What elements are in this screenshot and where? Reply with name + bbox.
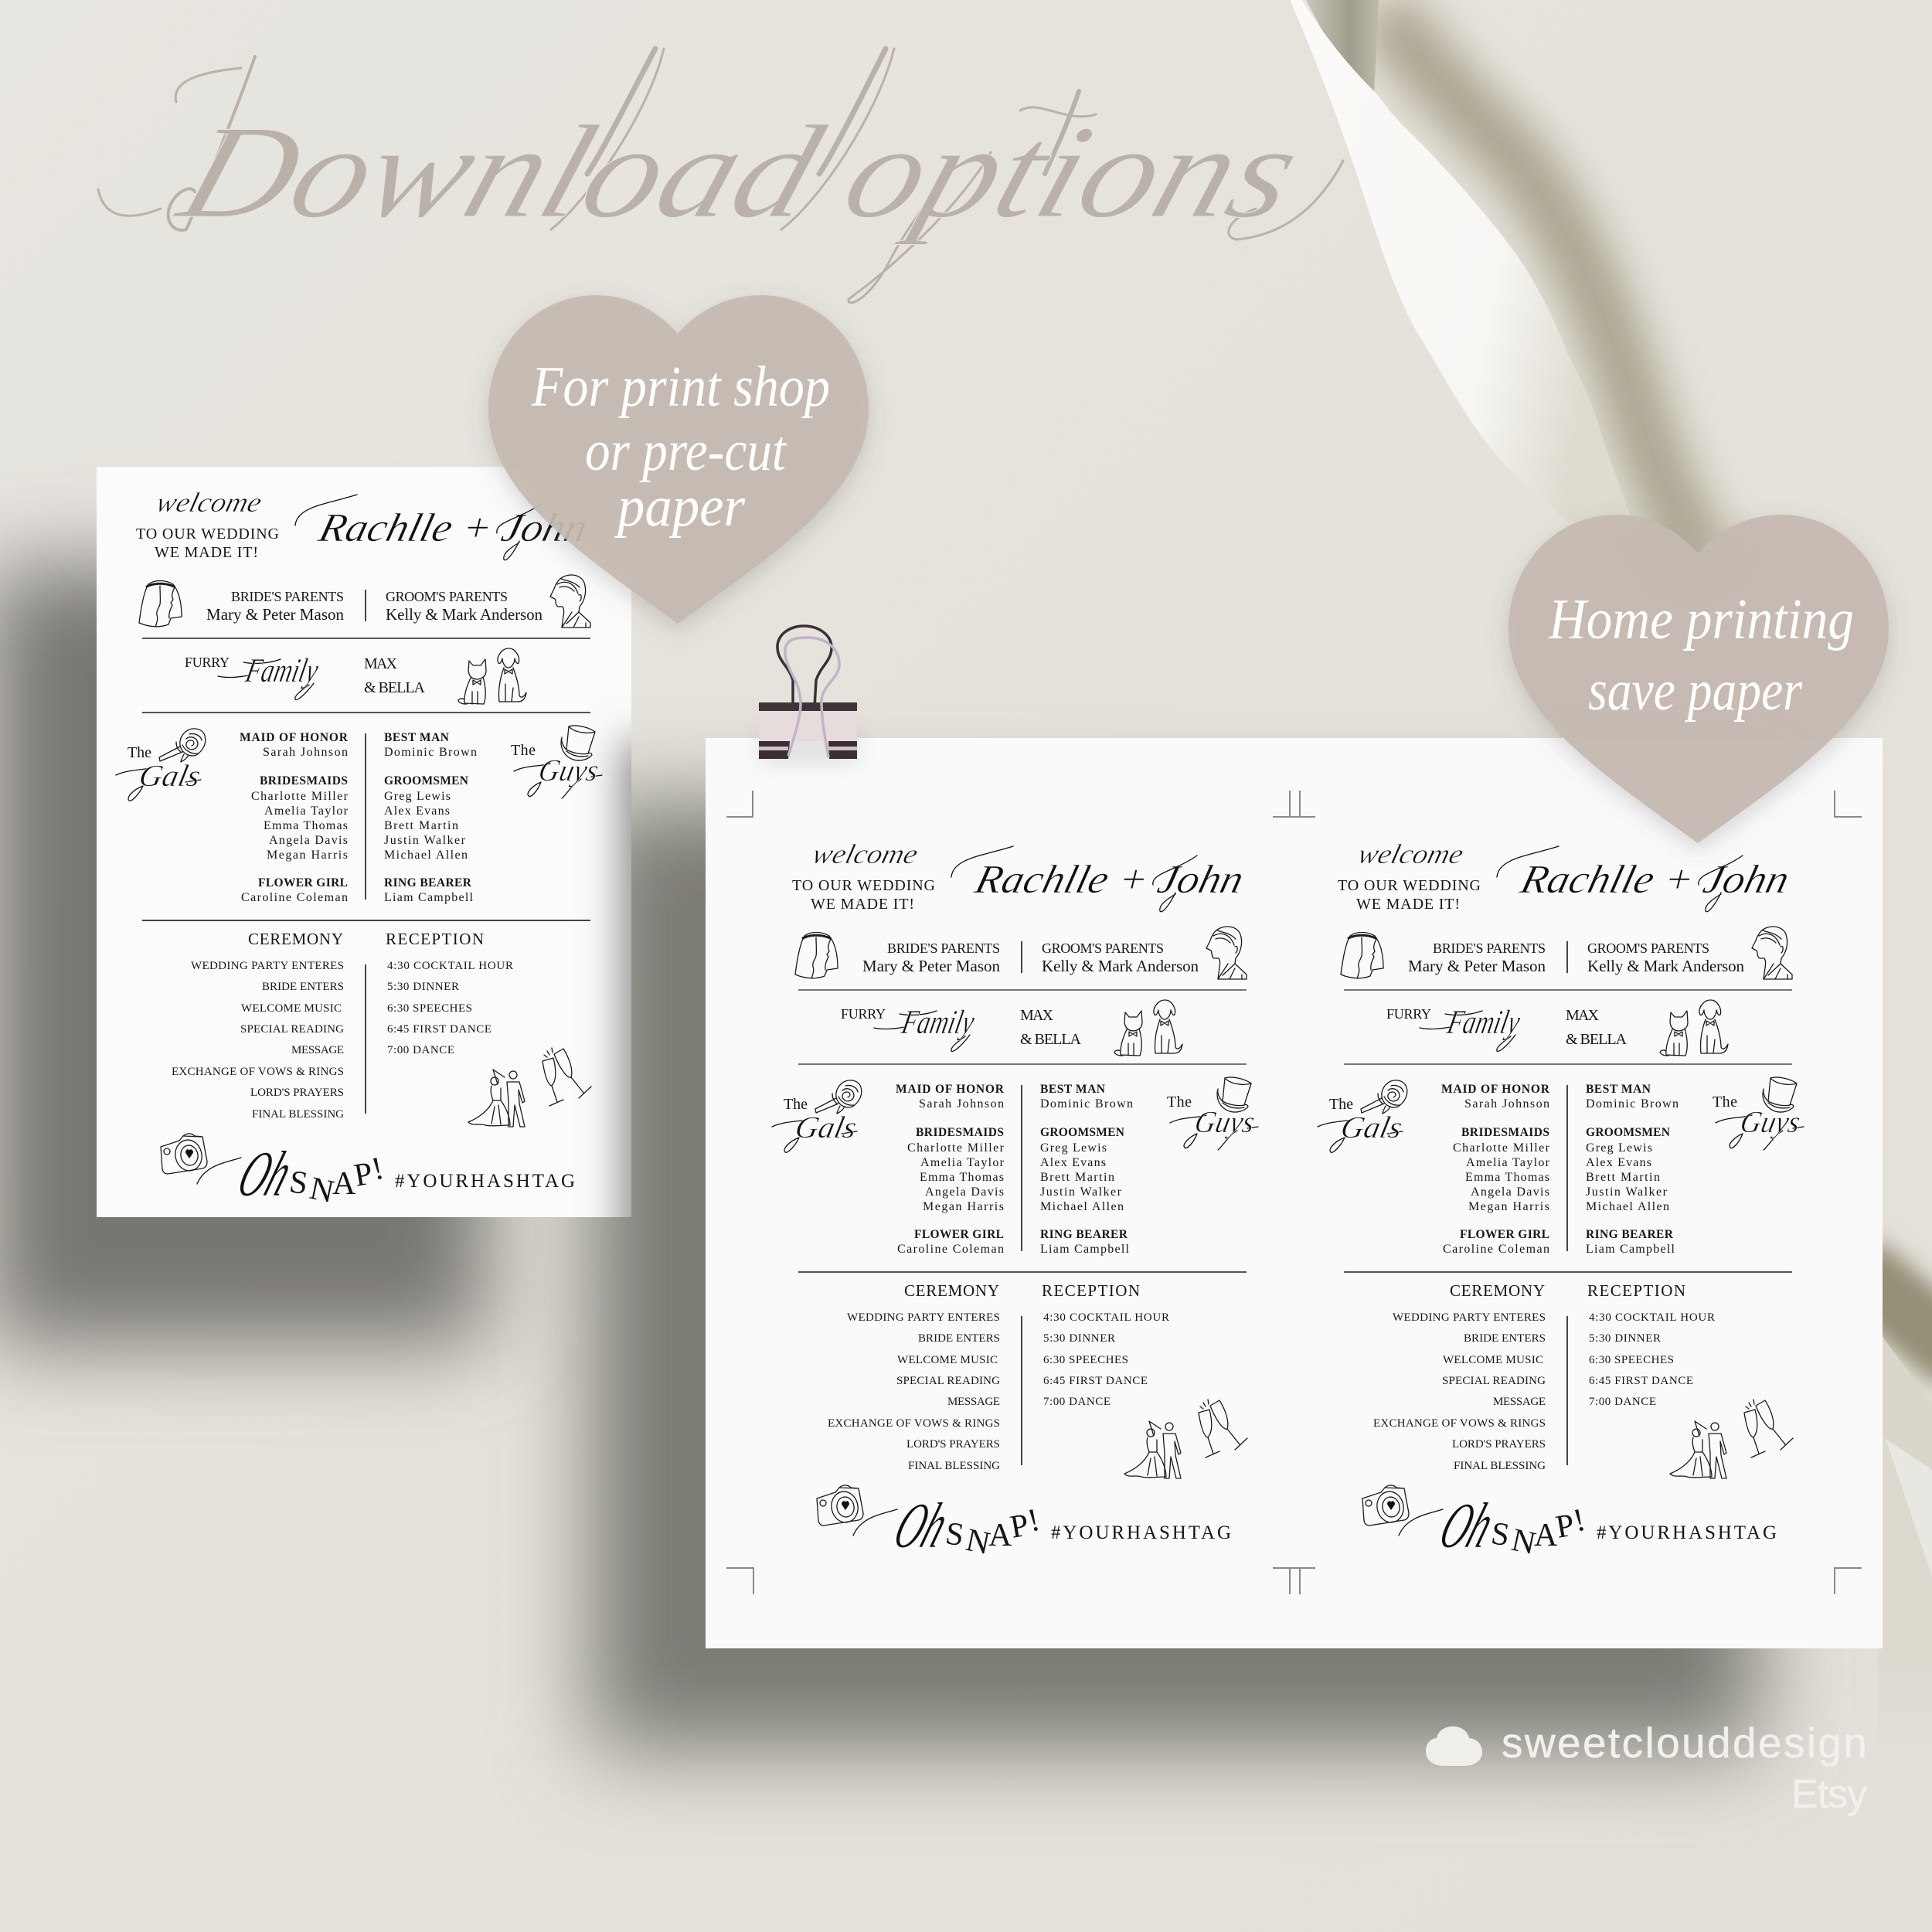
- ceremony: FINAL BLESSING: [1454, 1460, 1546, 1472]
- ceremony: WEDDING PARTY ENTERES: [847, 1311, 1000, 1324]
- reception: RECEPTION: [1042, 1281, 1140, 1300]
- icon: camera: [1362, 1485, 1409, 1526]
- bride side party: MAID OF HONOR: [896, 1083, 1005, 1096]
- icon: champagne glasses: [1744, 1400, 1793, 1458]
- groom side party: Brett Martin: [1586, 1171, 1660, 1184]
- heart text: [531, 355, 830, 539]
- groom side party: BEST MAN: [1040, 1083, 1105, 1096]
- oh snap hashtag: [1430, 1489, 1777, 1562]
- welcome script: welcome: [1355, 838, 1467, 869]
- brand name: sweetclouddesign: [1502, 1719, 1867, 1767]
- program content: sheet copy two: [1318, 838, 1804, 1562]
- welcome lines: WE MADE IT!: [811, 896, 914, 913]
- welcome lines: TO OUR WEDDING: [136, 526, 279, 543]
- program content: sheet copy one: [772, 838, 1258, 1562]
- welcome lines: [1338, 877, 1481, 913]
- icon: dancing couple: [1670, 1421, 1726, 1478]
- the gals: [1329, 1096, 1406, 1145]
- ceremony: FINAL BLESSING: [908, 1460, 1000, 1472]
- parents: Mary & Peter Mason: [206, 605, 345, 624]
- ceremony: MESSAGE: [947, 1396, 1000, 1408]
- bride side party: Charlotte Miller: [251, 790, 349, 803]
- heart text: Home printing: [1548, 588, 1854, 651]
- heart text: For print shop: [531, 355, 830, 419]
- oh snap hashtag: Oh: [1430, 1489, 1503, 1561]
- logo: [1426, 1719, 1867, 1817]
- parents: Kelly & Mark Anderson: [1587, 957, 1745, 975]
- bride side party: Megan Harris: [923, 1200, 1004, 1213]
- ceremony: LORD'S PRAYERS: [906, 1438, 1000, 1451]
- the guys: The: [1713, 1094, 1737, 1111]
- reception: 5:30 DINNER: [1043, 1332, 1115, 1345]
- icon: top hat: [1217, 1077, 1251, 1112]
- couple names: Rachlle + John: [970, 858, 1248, 902]
- bride side party: FLOWER GIRL: [1460, 1228, 1549, 1241]
- icon: cat and dog: [458, 648, 526, 704]
- groom side party: Greg Lewis: [1040, 1141, 1107, 1155]
- bride side party: Emma Thomas: [264, 819, 348, 832]
- ceremony: SPECIAL READING: [240, 1023, 344, 1036]
- bride side party: Amelia Taylor: [1466, 1156, 1550, 1169]
- reception: 7:00 DANCE: [1589, 1396, 1656, 1408]
- groom side party: Brett Martin: [1040, 1171, 1114, 1184]
- the gals: The: [128, 744, 151, 761]
- reception: [386, 930, 513, 1056]
- welcome lines: [136, 526, 279, 561]
- groom side party: Michael Allen: [1586, 1200, 1669, 1213]
- welcome lines: TO OUR WEDDING: [792, 877, 935, 894]
- groom side party: Justin Walker: [384, 834, 466, 847]
- parents: Kelly & Mark Anderson: [386, 605, 543, 624]
- oh snap hashtag: Oh: [885, 1489, 957, 1561]
- reception: [1587, 1281, 1715, 1408]
- parents: BRIDE'S PARENTS: [887, 940, 1000, 956]
- the guys: Guys: [1192, 1104, 1258, 1139]
- reception: 7:00 DANCE: [387, 1044, 454, 1056]
- groom side party: Brett Martin: [384, 819, 458, 832]
- ceremony: [172, 930, 344, 1121]
- the gals: Gals: [136, 758, 204, 793]
- reception: RECEPTION: [1587, 1281, 1685, 1300]
- furry family: MAX: [1020, 1007, 1054, 1024]
- groom side party: GROOMSMEN: [1586, 1126, 1670, 1139]
- furry family: & BELLA: [1020, 1031, 1082, 1048]
- groom side party: Liam Campbell: [1586, 1243, 1675, 1256]
- icon: groom: [1206, 927, 1247, 979]
- the guys: [1167, 1094, 1258, 1139]
- couple names: Rachlle + John: [1515, 858, 1794, 902]
- ceremony: SPECIAL READING: [1442, 1375, 1546, 1387]
- ceremony: MESSAGE: [1493, 1396, 1546, 1408]
- parents: [862, 940, 1199, 975]
- ceremony: WELCOME MUSIC: [1443, 1354, 1543, 1366]
- groom side party: Michael Allen: [384, 849, 468, 862]
- reception: 6:45 FIRST DANCE: [1043, 1375, 1148, 1387]
- bride side party: Angela Davis: [925, 1185, 1004, 1199]
- parents: GROOM'S PARENTS: [386, 589, 508, 604]
- the gals: [128, 744, 204, 793]
- bride side party: Sarah Johnson: [1464, 1097, 1549, 1111]
- reception: 4:30 COCKTAIL HOUR: [1043, 1311, 1169, 1324]
- furry family: FURRY: [841, 1006, 886, 1022]
- couple names: Rachlle + John: [314, 506, 592, 550]
- oh snap hashtag: Oh: [229, 1138, 301, 1209]
- ribbon lower right shadow: [1855, 1267, 1932, 1360]
- bride side party: Charlotte Miller: [907, 1141, 1005, 1155]
- bride side party: [896, 1083, 1005, 1256]
- groom side party: RING BEARER: [1586, 1228, 1674, 1241]
- oh snap hashtag: [885, 1489, 1231, 1562]
- groom side party: Greg Lewis: [1586, 1141, 1652, 1155]
- brand shop: Etsy: [1791, 1772, 1867, 1817]
- the guys: Guys: [1737, 1104, 1804, 1139]
- bride side party: [1441, 1083, 1550, 1256]
- ceremony: LORD'S PRAYERS: [250, 1087, 344, 1099]
- script flourishes: [116, 495, 602, 1184]
- ceremony: [828, 1281, 1000, 1472]
- the guys: Guys: [536, 753, 602, 787]
- title: [98, 49, 1343, 303]
- groom side party: Alex Evans: [1586, 1156, 1651, 1169]
- ceremony: BRIDE ENTERS: [1464, 1332, 1546, 1345]
- oh snap hashtag: #YOURHASHTAG: [395, 1171, 575, 1192]
- parents: [1408, 940, 1745, 975]
- reception: 6:45 FIRST DANCE: [387, 1023, 492, 1036]
- ceremony: LORD'S PRAYERS: [1452, 1438, 1546, 1451]
- groom side party: [1040, 1083, 1133, 1256]
- groom side party: RING BEARER: [384, 876, 472, 889]
- furry family: [841, 1006, 1082, 1048]
- reception: 6:30 SPEECHES: [1043, 1354, 1128, 1366]
- groom side party: RING BEARER: [1040, 1228, 1128, 1241]
- furry family: & BELLA: [1566, 1031, 1628, 1048]
- groom side party: GROOMSMEN: [384, 774, 468, 787]
- bride side party: Angela Davis: [269, 834, 348, 847]
- parents: GROOM'S PARENTS: [1587, 940, 1709, 956]
- icon: bride veil: [795, 932, 838, 978]
- program content: single: Family: [242, 651, 322, 689]
- groom side party: GROOMSMEN: [1040, 1126, 1124, 1139]
- reception: RECEPTION: [386, 930, 484, 948]
- ribbon: white front: [1290, 0, 1631, 526]
- welcome lines: WE MADE IT!: [155, 544, 258, 561]
- oh snap hashtag: SNAP!: [944, 1502, 1043, 1562]
- ribbon lower right: [1878, 1331, 1932, 1470]
- welcome script: welcome: [809, 838, 921, 869]
- ceremony: [1373, 1281, 1546, 1472]
- icon: groom: [1752, 927, 1792, 979]
- groom side party: BEST MAN: [384, 731, 449, 744]
- oh snap hashtag: SNAP!: [1489, 1502, 1589, 1562]
- groom side party: Alex Evans: [1040, 1156, 1106, 1169]
- groom side party: Liam Campbell: [1040, 1243, 1130, 1256]
- parents: BRIDE'S PARENTS: [231, 589, 344, 604]
- the guys: The: [1167, 1094, 1192, 1111]
- heart: home printing: [1509, 515, 1889, 843]
- icon: rose: [1361, 1080, 1407, 1114]
- title text: Download options: [162, 99, 1317, 246]
- groom side party: Liam Campbell: [384, 891, 474, 904]
- icon: top hat: [561, 726, 595, 760]
- furry family: FURRY: [1386, 1006, 1431, 1022]
- ceremony: CEREMONY: [248, 930, 343, 948]
- bride side party: MAID OF HONOR: [1441, 1083, 1550, 1096]
- bride side party: Sarah Johnson: [263, 746, 348, 759]
- oh snap hashtag: [229, 1138, 575, 1210]
- bride side party: Amelia Taylor: [264, 804, 349, 818]
- ceremony: EXCHANGE OF VOWS & RINGS: [172, 1066, 344, 1078]
- ceremony: EXCHANGE OF VOWS & RINGS: [828, 1417, 1000, 1430]
- the gals: The: [1329, 1096, 1353, 1113]
- groom side party: Justin Walker: [1040, 1185, 1122, 1199]
- ribbon shadow: [1383, 8, 1708, 564]
- bride side party: BRIDESMAIDS: [260, 774, 348, 787]
- groom side party: Michael Allen: [1040, 1200, 1124, 1213]
- the gals: The: [784, 1096, 808, 1113]
- the gals: Gals: [792, 1110, 860, 1145]
- oh snap hashtag: #YOURHASHTAG: [1597, 1522, 1777, 1543]
- icon: top hat: [1763, 1077, 1797, 1112]
- the guys: The: [511, 742, 536, 759]
- the gals: [784, 1096, 860, 1145]
- heart: for print shop: [488, 295, 869, 624]
- parents: Mary & Peter Mason: [1408, 957, 1546, 975]
- bride side party: Angela Davis: [1471, 1185, 1549, 1199]
- shadow of large sheet: [591, 804, 1758, 1750]
- reception: 5:30 DINNER: [387, 981, 459, 993]
- panel: print shop card: [97, 467, 631, 1217]
- furry family: & BELLA: [364, 679, 426, 696]
- program content: single: [116, 487, 602, 1210]
- groom side party: BEST MAN: [1586, 1083, 1651, 1096]
- welcome lines: TO OUR WEDDING: [1338, 877, 1481, 894]
- groom side party: Justin Walker: [1586, 1185, 1668, 1199]
- icon: groom: [550, 575, 590, 628]
- ceremony: BRIDE ENTERS: [262, 981, 344, 993]
- ceremony: CEREMONY: [904, 1281, 999, 1300]
- parents: BRIDE'S PARENTS: [1433, 940, 1546, 956]
- heart text: save paper: [1588, 659, 1803, 723]
- icon: bride veil: [139, 581, 182, 627]
- furry family: [1386, 1006, 1628, 1048]
- furry family: MAX: [364, 655, 398, 672]
- ceremony: BRIDE ENTERS: [918, 1332, 1000, 1345]
- program content: sheet copy two: Family: [1444, 1002, 1524, 1041]
- bride side party: MAID OF HONOR: [240, 731, 349, 744]
- furry family: [185, 655, 426, 696]
- parents: [206, 589, 543, 624]
- the guys: [1713, 1094, 1804, 1139]
- ceremony: MESSAGE: [291, 1044, 344, 1056]
- groom side party: Dominic Brown: [384, 746, 477, 759]
- bride side party: Amelia Taylor: [920, 1156, 1005, 1169]
- icon: rose: [159, 729, 206, 762]
- icon: cloud: [1426, 1726, 1482, 1766]
- heart text: paper: [614, 475, 746, 539]
- crop marks: [726, 791, 1862, 1594]
- icon: rose: [815, 1080, 862, 1114]
- ceremony: WELCOME MUSIC: [897, 1354, 998, 1366]
- ceremony: FINAL BLESSING: [252, 1108, 344, 1121]
- ceremony: CEREMONY: [1450, 1281, 1545, 1300]
- groom side party: Dominic Brown: [1586, 1097, 1679, 1111]
- the gals: Gals: [1338, 1110, 1406, 1145]
- oh snap hashtag: SNAP!: [287, 1151, 387, 1210]
- groom side party: Alex Evans: [384, 804, 450, 818]
- reception: 4:30 COCKTAIL HOUR: [1589, 1311, 1715, 1324]
- icon: camera: [161, 1134, 207, 1174]
- reception: 6:45 FIRST DANCE: [1589, 1375, 1693, 1387]
- bride side party: Emma Thomas: [1465, 1171, 1549, 1184]
- icon: cat and dog: [1660, 1000, 1728, 1056]
- icon: dancing couple: [468, 1070, 525, 1127]
- shadow of small card: [0, 568, 487, 1345]
- icon: bride veil: [1341, 932, 1383, 978]
- reception: 6:30 SPEECHES: [1589, 1354, 1674, 1366]
- welcome lines: [792, 877, 935, 913]
- ribbon: satin underside: [1306, 0, 1379, 94]
- heart text: or pre-cut: [585, 420, 787, 483]
- ceremony: EXCHANGE OF VOWS & RINGS: [1373, 1417, 1546, 1430]
- bride side party: Megan Harris: [1468, 1200, 1549, 1213]
- icon: champagne glasses: [1199, 1400, 1247, 1458]
- groom side party: Greg Lewis: [384, 790, 451, 803]
- bride side party: [240, 731, 349, 904]
- ceremony: WEDDING PARTY ENTERES: [1393, 1311, 1546, 1324]
- ceremony: WEDDING PARTY ENTERES: [191, 960, 344, 972]
- oh snap hashtag: #YOURHASHTAG: [1051, 1522, 1231, 1543]
- program content: sheet copy one: Family: [898, 1002, 978, 1041]
- reception: 5:30 DINNER: [1589, 1332, 1661, 1345]
- bride side party: Sarah Johnson: [919, 1097, 1004, 1111]
- bride side party: Megan Harris: [267, 849, 348, 862]
- reception: 4:30 COCKTAIL HOUR: [387, 960, 513, 972]
- icon: cat and dog: [1114, 1000, 1182, 1056]
- icon: camera: [817, 1485, 863, 1526]
- reception: [1042, 1281, 1169, 1408]
- script flourishes: [772, 846, 1258, 1536]
- ceremony: SPECIAL READING: [896, 1375, 1000, 1387]
- bride side party: BRIDESMAIDS: [1461, 1126, 1549, 1139]
- reception: 7:00 DANCE: [1043, 1396, 1111, 1408]
- welcome script: welcome: [153, 487, 265, 518]
- title flourishes: [98, 49, 1343, 303]
- furry family: FURRY: [185, 655, 230, 670]
- script flourishes: [1318, 846, 1804, 1536]
- bride side party: FLOWER GIRL: [914, 1228, 1004, 1241]
- parents: Mary & Peter Mason: [862, 957, 1000, 975]
- welcome lines: WE MADE IT!: [1356, 896, 1460, 913]
- parents: GROOM'S PARENTS: [1042, 940, 1164, 956]
- furry family: MAX: [1566, 1007, 1600, 1024]
- groom side party: Dominic Brown: [1040, 1097, 1133, 1111]
- parents: Kelly & Mark Anderson: [1042, 957, 1199, 975]
- icon: dancing couple: [1124, 1421, 1181, 1478]
- bride side party: Caroline Coleman: [1443, 1243, 1549, 1256]
- the guys: [511, 742, 602, 787]
- bride side party: BRIDESMAIDS: [916, 1126, 1004, 1139]
- bride side party: Charlotte Miller: [1453, 1141, 1550, 1155]
- heart text: [1548, 588, 1854, 723]
- bride side party: Caroline Coleman: [897, 1243, 1004, 1256]
- bride side party: FLOWER GIRL: [258, 876, 348, 889]
- icon: binder clip: [759, 626, 857, 764]
- bride side party: Emma Thomas: [920, 1171, 1004, 1184]
- groom side party: [384, 731, 477, 904]
- groom side party: [1586, 1083, 1679, 1256]
- bride side party: Caroline Coleman: [241, 891, 348, 904]
- reception: 6:30 SPEECHES: [387, 1002, 472, 1015]
- ceremony: WELCOME MUSIC: [241, 1002, 342, 1015]
- icon: champagne glasses: [543, 1048, 591, 1106]
- panel: home printing sheet: [706, 738, 1883, 1648]
